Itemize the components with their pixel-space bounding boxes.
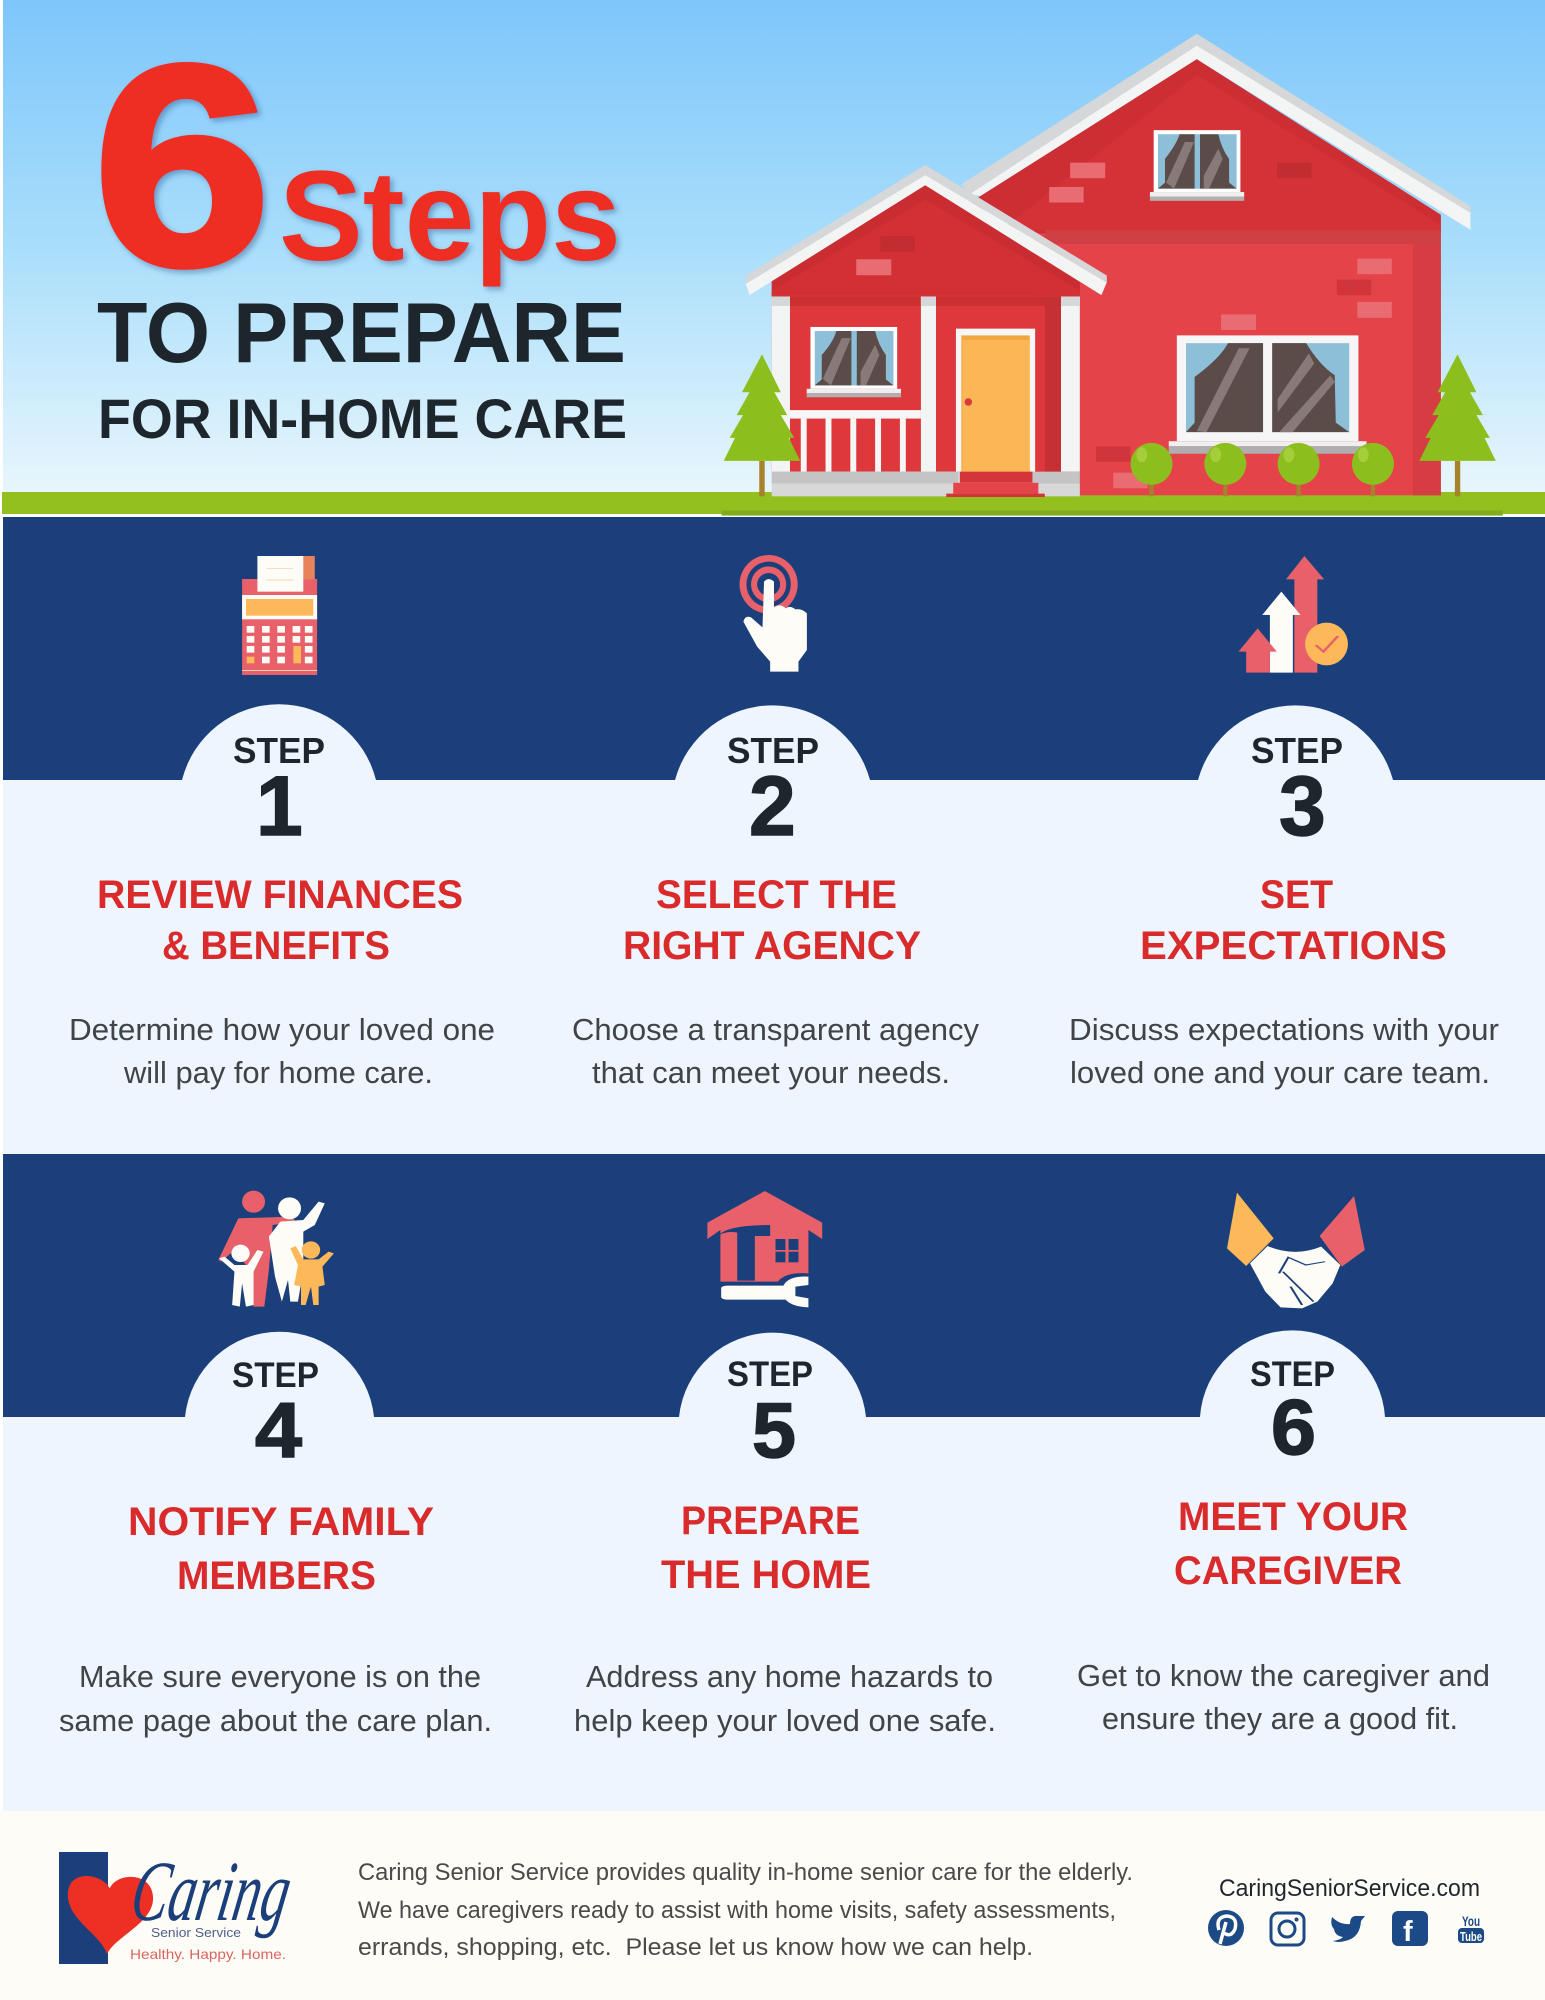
title — [93, 7, 627, 450]
footer description: Caring Senior Service provides quality in-home senior care for the elderly. — [358, 1859, 1133, 1886]
line FOR IN-HOME CARE: FOR IN-HOME CARE — [98, 387, 627, 450]
step label: STEP — [727, 1355, 813, 1394]
icon: youtube: Tube — [1460, 1929, 1482, 1944]
panel: step 5 — [574, 1333, 996, 1738]
panel: step 2 — [572, 705, 979, 1090]
icon: calculator — [242, 556, 317, 675]
heading — [1140, 873, 1447, 968]
step number: 4 — [255, 1386, 302, 1474]
heading: RIGHT AGENCY — [623, 924, 921, 968]
trees — [724, 354, 1496, 496]
description — [1077, 1658, 1490, 1736]
step tab — [1198, 705, 1393, 780]
heading: & BENEFITS — [162, 924, 390, 968]
heading: THE HOME — [661, 1553, 871, 1597]
icon: facebook — [1392, 1911, 1428, 1948]
heading: REVIEW FINANCES — [97, 873, 463, 917]
logo wordmark: Caring — [125, 1844, 298, 1939]
heading: PREPARE — [681, 1499, 860, 1543]
heading: MEMBERS — [177, 1554, 376, 1598]
heading — [1174, 1495, 1408, 1593]
description: that can meet your needs. — [592, 1055, 950, 1090]
icon: youtube — [1458, 1913, 1484, 1944]
description — [59, 1659, 492, 1738]
description: loved one and your care team. — [1070, 1055, 1490, 1090]
panel: footer — [0, 1811, 1545, 2000]
heading — [623, 873, 921, 968]
icon: facebook: f — [1403, 1916, 1413, 1948]
step tab — [675, 705, 870, 780]
heading: MEET YOUR — [1178, 1495, 1408, 1539]
bushes — [1131, 443, 1394, 496]
icon: home repair — [707, 1191, 822, 1307]
step number: 3 — [1279, 759, 1326, 853]
icon: growth arrows with check — [1239, 556, 1348, 673]
description: same page about the care plan. — [59, 1703, 492, 1738]
panel: step 4 — [59, 1332, 492, 1738]
icon: twitter — [1331, 1916, 1365, 1942]
large window — [1169, 335, 1366, 454]
heading — [128, 1500, 434, 1598]
front porch house — [746, 165, 1107, 497]
logo subline: Senior Service — [151, 1925, 241, 1940]
step label: STEP — [1250, 1355, 1335, 1394]
step tab — [1200, 1330, 1385, 1417]
step number: 1 — [256, 759, 303, 853]
icon: handshake — [1227, 1193, 1365, 1308]
description: will pay for home care. — [123, 1055, 433, 1090]
description — [572, 1012, 979, 1090]
icon: heart — [68, 1876, 153, 1954]
icon: instagram — [1271, 1913, 1304, 1945]
word Steps: Steps — [279, 145, 621, 288]
step number: 6 — [1271, 1383, 1316, 1471]
panel: step 4-6 navy band — [3, 1154, 1545, 1417]
description: Determine how your loved one — [69, 1012, 495, 1047]
upper window — [1150, 130, 1244, 201]
icon: youtube: You — [1462, 1913, 1480, 1929]
description: ensure they are a good fit. — [1102, 1701, 1458, 1736]
description: Choose a transparent agency — [572, 1012, 979, 1047]
heading: NOTIFY FAMILY — [128, 1500, 434, 1544]
description — [69, 1012, 495, 1090]
illustration: red house — [722, 34, 1503, 516]
heading: CAREGIVER — [1174, 1549, 1402, 1593]
description: Make sure everyone is on the — [79, 1659, 481, 1694]
step tab — [182, 704, 376, 780]
step tab — [185, 1332, 374, 1417]
step tab — [679, 1333, 866, 1417]
footer description — [358, 1859, 1133, 1961]
panel: sky header — [3, 0, 1545, 493]
step label: STEP — [1251, 730, 1343, 771]
heading — [97, 873, 463, 968]
description: Get to know the caregiver and — [1077, 1658, 1490, 1693]
inner lawn — [722, 511, 1503, 516]
panel: step 3 — [1069, 705, 1499, 1090]
line TO PREPARE: TO PREPARE — [97, 286, 626, 381]
big numeral 6: 6 — [93, 7, 271, 325]
heading: SET — [1260, 873, 1333, 917]
heading: EXPECTATIONS — [1140, 924, 1447, 968]
icon: family — [218, 1191, 334, 1307]
footer description: errands, shopping, etc. Please let us know how we can help. — [358, 1934, 1033, 1961]
logo: Caring Senior Service — [59, 1844, 298, 1964]
description — [574, 1659, 996, 1738]
ground strip — [2, 492, 1545, 514]
description: Discuss expectations with your — [1069, 1012, 1499, 1047]
footer description: We have caregivers ready to assist with home visits, safety assessments, — [358, 1897, 1116, 1924]
heading: SELECT THE — [656, 873, 897, 917]
panel: step 4-6 light background — [3, 1417, 1545, 1811]
panel: step 1-3 light background — [3, 780, 1545, 1154]
panel: step 6 — [1077, 1330, 1490, 1736]
website: CaringSeniorService.com — [1219, 1875, 1480, 1902]
description: Address any home hazards to — [586, 1659, 993, 1694]
step label: STEP — [233, 730, 325, 771]
step label: STEP — [727, 730, 819, 771]
heading — [661, 1499, 871, 1597]
description — [1069, 1012, 1499, 1090]
icon: hand touching target — [740, 555, 807, 672]
step number: 2 — [749, 759, 796, 853]
icon: pinterest — [1208, 1910, 1244, 1946]
panel: step 1 — [69, 704, 495, 1090]
logo tagline: Healthy. Happy. Home. — [130, 1946, 286, 1962]
panel: step 1-3 navy band — [3, 517, 1545, 780]
step number: 5 — [752, 1386, 796, 1474]
description: help keep your loved one safe. — [574, 1703, 996, 1738]
step label: STEP — [232, 1356, 319, 1395]
